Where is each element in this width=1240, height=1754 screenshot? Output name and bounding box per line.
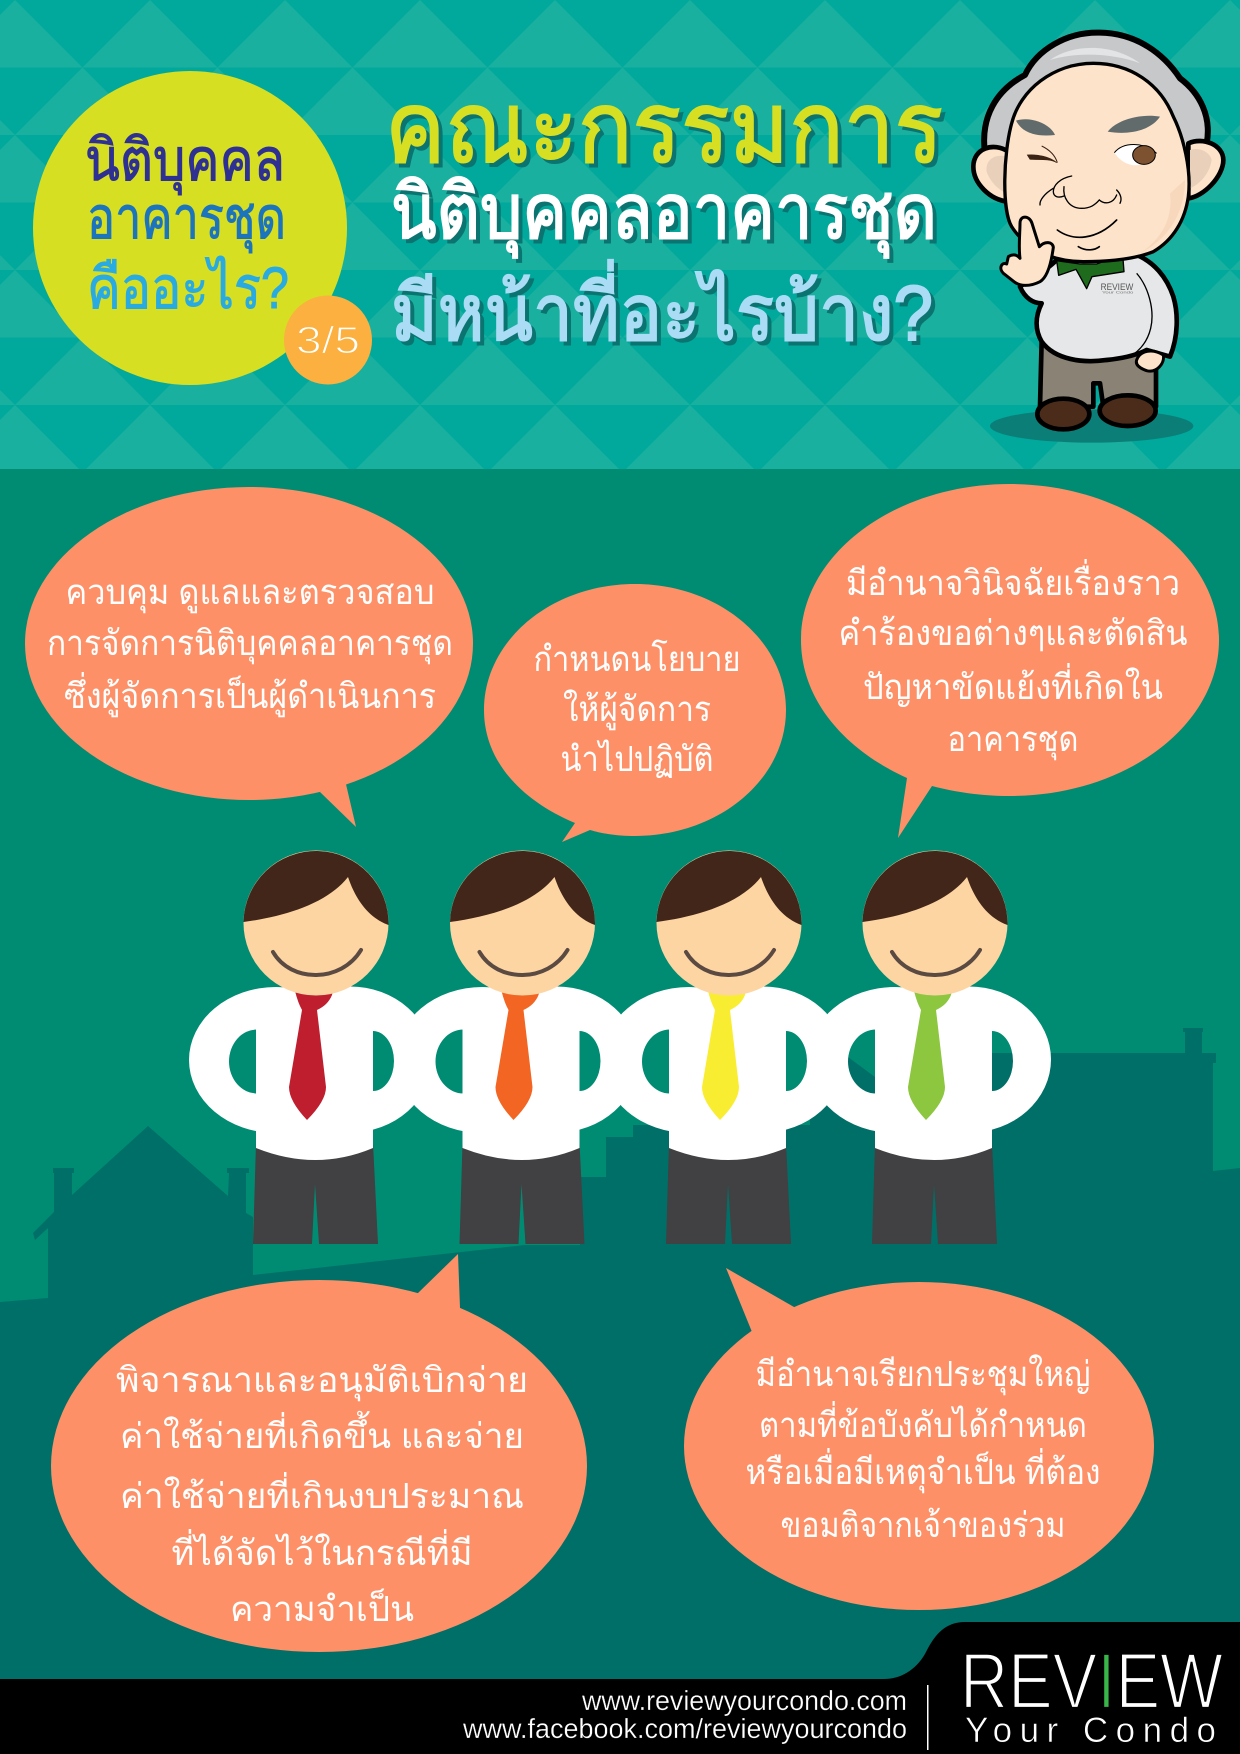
title text lines bbox=[385, 72, 943, 357]
man 3 tie bbox=[702, 991, 746, 1120]
bubble 4 text: ค่าใช้จ่ายที่เกิดขึ้น และจ่าย bbox=[120, 1410, 524, 1456]
man 3 hair bbox=[656, 851, 802, 925]
mascot right hand bbox=[1136, 351, 1164, 371]
speech bubble 4: approve expenses bbox=[51, 1254, 587, 1652]
background: lower green panel bbox=[0, 469, 1240, 1754]
bubble 3 text bbox=[838, 559, 1188, 760]
badge heading text: นิติบุคคล bbox=[85, 128, 285, 196]
bubble 1 text: การจัดการนิติบุคคลอาคารชุด bbox=[47, 624, 453, 664]
footer logo: REVIEW Your Condo: Your Condo bbox=[965, 1711, 1216, 1750]
man 4 arms bbox=[808, 986, 1051, 1133]
mascot face bbox=[1005, 63, 1189, 262]
title shadow lines: มีหน้าที่อะไรบ้าง? bbox=[395, 264, 937, 361]
mascot ears bbox=[973, 147, 1008, 202]
man 2: orange tie bbox=[396, 850, 638, 1244]
title text lines: คณะกรรมการ bbox=[385, 72, 943, 184]
mascot green collar bbox=[1057, 254, 1124, 289]
bubble 2 text: กำหนดนโยบาย bbox=[534, 639, 740, 679]
man 4 smile bbox=[892, 950, 980, 975]
mascot mouth bbox=[1057, 220, 1117, 250]
man 2 torso bbox=[462, 991, 580, 1160]
man 1 trousers bbox=[253, 1143, 378, 1244]
bubble 3 text: มีอำนาจวินิจฉัยเรื่องราว bbox=[846, 559, 1180, 603]
mascot winking eye bbox=[1027, 146, 1057, 163]
man 4 hair bbox=[862, 851, 1008, 925]
speech bubble 1: control and inspection bbox=[25, 487, 473, 827]
bubble 5 text: ขอมติจากเจ้าของร่วม bbox=[780, 1506, 1066, 1545]
bubble 3 text: คำร้องขอต่างๆและตัดสิน bbox=[838, 614, 1188, 653]
badge: part number 3/5: 3/5 bbox=[296, 320, 360, 362]
man 2 tie bbox=[496, 991, 540, 1120]
bubble 5 text: หรือเมื่อมีเหตุจำเป็น ที่ต้อง bbox=[746, 1448, 1100, 1493]
man 1 head bbox=[244, 850, 388, 996]
bubble 4 text: ที่ได้จัดไว้ในกรณีที่มี bbox=[172, 1529, 472, 1573]
mascot shoes bbox=[1037, 399, 1089, 429]
man 2 trousers bbox=[460, 1143, 584, 1244]
footer logo: REVIEW Your Condo: REVIEW bbox=[960, 1636, 1223, 1725]
man 2 smile bbox=[480, 950, 568, 975]
man 1 torso bbox=[256, 991, 373, 1160]
mascot shirt logo: REVIEW bbox=[1101, 282, 1134, 292]
bubble 3 text: ปัญหาขัดแย้งที่เกิดใน bbox=[863, 663, 1163, 707]
bubble 4 text: พิจารณาและอนุมัติเบิกจ่าย bbox=[116, 1361, 528, 1401]
footer black band bbox=[0, 1622, 1240, 1754]
title shadow lines: คณะกรรมการ bbox=[389, 76, 947, 188]
bubble 4 text: ค่าใช้จ่ายที่เกินงบประมาณ bbox=[120, 1472, 524, 1516]
footer website links: www.reviewyourcondo.com bbox=[581, 1685, 907, 1716]
main title bbox=[385, 72, 947, 361]
man 2 hair bbox=[450, 851, 595, 925]
mascot belly line bbox=[1127, 273, 1152, 358]
badge: yellow circle bbox=[33, 71, 347, 385]
bubble 1 text: ซึ่งผู้จัดการเป็นผู้ดำเนินการ bbox=[64, 672, 436, 717]
mascot eyebrows bbox=[1016, 119, 1055, 136]
badge heading text: คืออะไร? bbox=[87, 255, 289, 321]
bubble 4 text: ความจำเป็น bbox=[230, 1588, 414, 1629]
speech bubble 2: set policy bbox=[484, 584, 786, 842]
man 4 head bbox=[862, 850, 1008, 996]
bubble 3 text: อาคารชุด bbox=[948, 720, 1078, 760]
mascot raised hand bbox=[1001, 217, 1053, 285]
four smiling businessmen bbox=[189, 850, 1051, 1244]
title text lines: นิติบุคคลอาคารชุด bbox=[391, 170, 937, 258]
title text lines: มีหน้าที่อะไรบ้าง? bbox=[391, 260, 933, 357]
bubble 1 text: ควบคุม ดูแลและตรวจสอบ bbox=[66, 573, 434, 613]
bubble 5 text: มีอำนาจเรียกประชุมใหญ่ bbox=[756, 1354, 1090, 1395]
man 4 tie bbox=[908, 991, 952, 1120]
mascot ground shadow bbox=[990, 409, 1193, 443]
mascot nose and cheeks bbox=[1040, 176, 1121, 208]
bubble 2 text: ให้ผู้จัดการ bbox=[563, 689, 711, 730]
title shadow lines: นิติบุคคลอาคารชุด bbox=[395, 174, 941, 262]
footer divider bbox=[927, 1685, 928, 1750]
mascot sweater bbox=[1020, 255, 1177, 361]
badge heading text bbox=[85, 128, 289, 321]
header panel with triangle pattern bbox=[0, 0, 1240, 469]
footer website links bbox=[462, 1685, 907, 1744]
man 1 hair bbox=[244, 851, 389, 925]
man 1: red tie bbox=[189, 850, 432, 1244]
man 3: yellow tie bbox=[602, 850, 845, 1244]
mascot open eye bbox=[1114, 144, 1157, 165]
man 4 trousers bbox=[872, 1143, 997, 1244]
man 2 head bbox=[450, 850, 595, 996]
bubble 2 text bbox=[534, 639, 740, 779]
bubble 5 text bbox=[746, 1354, 1100, 1545]
bubble 1 text bbox=[47, 573, 453, 717]
man 4: green tie bbox=[808, 850, 1051, 1244]
mascot trousers bbox=[1040, 340, 1156, 407]
bubble 4 text bbox=[116, 1361, 528, 1629]
mascot hair bbox=[984, 33, 1208, 160]
mascot: old man character winking bbox=[973, 33, 1223, 443]
man 3 torso bbox=[669, 991, 786, 1160]
mascot shirt logo: Your Condo bbox=[1102, 291, 1133, 295]
man 3 arms bbox=[602, 986, 845, 1133]
badge: part number 3/5 bbox=[284, 296, 372, 384]
man 1 tie bbox=[289, 991, 333, 1120]
man 1 smile bbox=[273, 950, 361, 975]
badge heading text: อาคารชุด bbox=[87, 186, 286, 254]
man 3 smile bbox=[686, 950, 774, 975]
man 4 torso bbox=[875, 991, 992, 1160]
footer website links: www.facebook.com/reviewyourcondo bbox=[462, 1713, 907, 1744]
man 3 trousers bbox=[666, 1143, 791, 1244]
title shadow lines bbox=[389, 76, 947, 361]
speech bubble 5: call general meeting bbox=[684, 1268, 1154, 1610]
bubble 5 text: ตามที่ข้อบังคับได้กำหนด bbox=[759, 1401, 1087, 1445]
bubble 2 text: นำไปปฏิบัติ bbox=[560, 739, 714, 779]
man 2 arms bbox=[396, 986, 638, 1133]
background: house and building silhouette bbox=[0, 1028, 1240, 1754]
man 1 arms bbox=[189, 986, 432, 1133]
speech bubble 3: judge disputes bbox=[801, 484, 1219, 838]
man 3 head bbox=[656, 850, 802, 996]
